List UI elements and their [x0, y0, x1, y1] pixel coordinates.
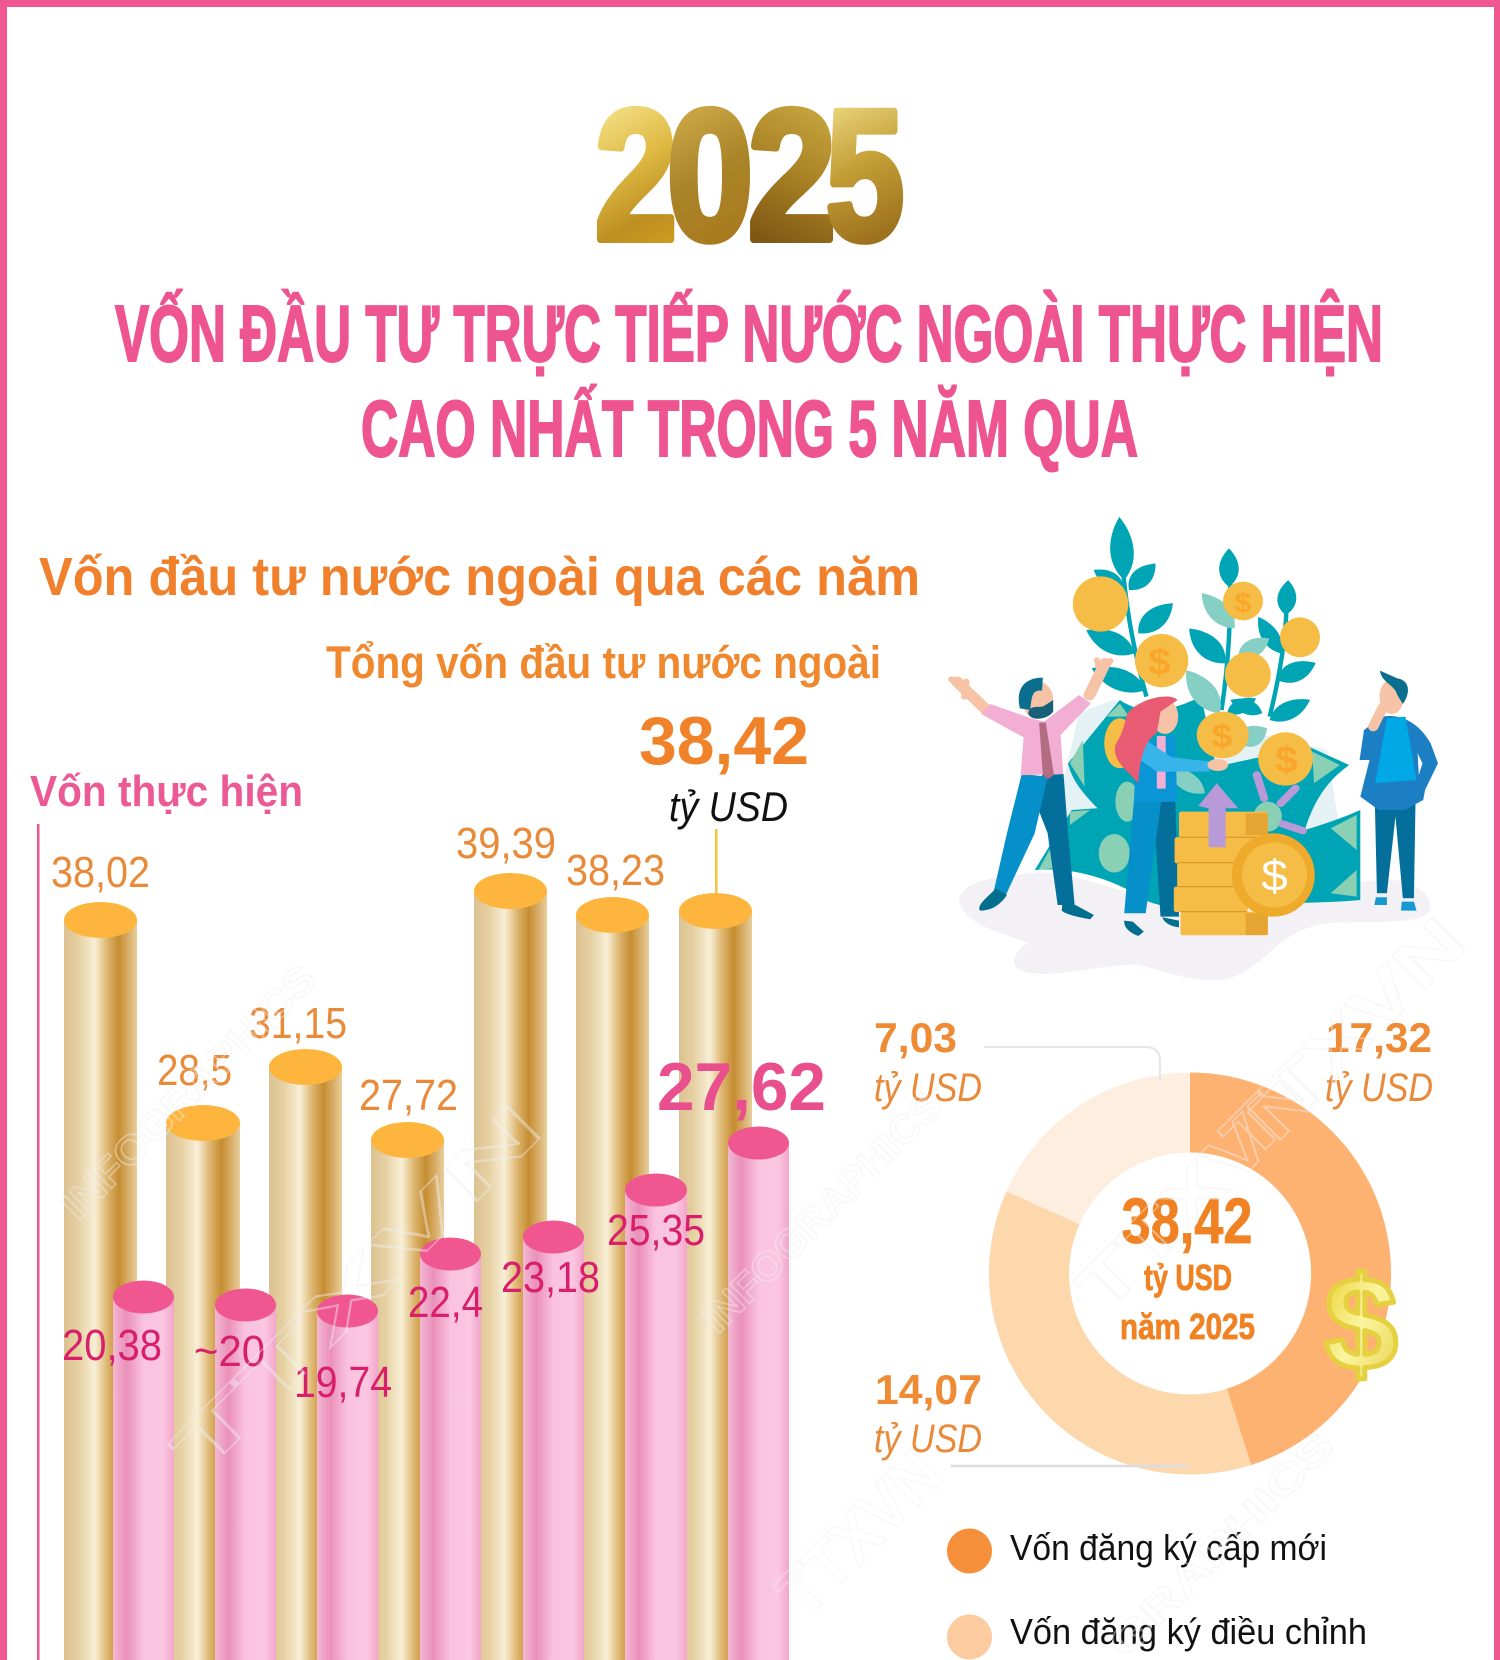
label: 14,07 billion USD: 14,07 — [875, 1366, 982, 1413]
implemented capital value labels: 25,35 — [607, 1206, 705, 1255]
legend item: new registered capital — [947, 1527, 1327, 1574]
watermarks: INFOGRAPHICS — [53, 957, 325, 1228]
dollar marks on coins — [1148, 588, 1298, 780]
legend item: adjusted registered capital: Vốn đăng ký điều chỉnh — [1010, 1611, 1367, 1652]
man with raised arms — [951, 660, 1111, 919]
plants — [1081, 516, 1320, 800]
watermarks: INFOGRAPHICS — [693, 1084, 951, 1341]
donut chart: 2025 registered capital — [989, 1072, 1398, 1475]
section heading: Vốn đầu tư nước ngoài qua các năm — [39, 547, 920, 607]
dollar marks on coins: $ — [1148, 642, 1171, 683]
legend item: adjusted registered capital — [947, 1611, 1367, 1660]
total value callout: tỷ USD — [669, 783, 788, 830]
thinking man — [1360, 671, 1438, 911]
gold coins on plants — [1073, 576, 1320, 786]
watermarks: TTXVN — [1207, 903, 1480, 1176]
donut centre total: tỷ USD — [1144, 1257, 1232, 1298]
money bills — [1035, 697, 1360, 909]
donut centre total: 38,42 — [1122, 1185, 1252, 1257]
total capital value labels: 27,72 — [359, 1071, 458, 1120]
total capital value labels: 31,15 — [249, 999, 347, 1048]
chart axis — [37, 824, 40, 1660]
heading: year 2025 in gold: 2 — [748, 73, 836, 279]
label: 14,07 billion USD — [874, 1366, 982, 1461]
subheading: total investment: Tổng vốn đầu tư nước ngoài — [326, 637, 881, 688]
segment: capital contribution — [1006, 1072, 1190, 1224]
coin stack with arrow: $ — [1261, 852, 1288, 900]
total capital value labels: 28,5 — [157, 1046, 232, 1095]
label: 7,03 billion USD: tỷ USD — [874, 1066, 982, 1110]
total value callout — [639, 703, 809, 895]
total capital value labels — [51, 819, 665, 1120]
dollar marks on coins: $ — [1275, 740, 1298, 780]
segment: adjusted registered capital — [989, 1191, 1251, 1475]
heading: year 2025 in gold: 2 — [595, 73, 677, 279]
total capital value labels: 39,39 — [456, 819, 556, 868]
dollar marks on coins: $ — [1234, 588, 1252, 619]
donut centre total: năm 2025 — [1120, 1306, 1255, 1347]
dollar marks on coins: $ — [1212, 718, 1233, 755]
heading: year 2025 in gold: 0 — [667, 73, 753, 279]
watermarks: TTXVN — [157, 1088, 557, 1489]
implemented capital value labels: 22,4 — [408, 1278, 483, 1327]
implemented capital value labels: 20,38 — [62, 1321, 162, 1370]
label: 17,32 billion USD: 17,32 — [1326, 1014, 1432, 1061]
subheading: implemented capital: Vốn thực hiện — [30, 767, 303, 816]
legend item: new registered capital: Vốn đăng ký cấp mới — [1010, 1527, 1327, 1568]
watermarks: TTXVN — [1062, 1053, 1335, 1326]
label: 7,03 billion USD: 7,03 — [874, 1014, 957, 1061]
coin stack with arrow — [1174, 775, 1315, 935]
implemented capital value labels: 23,18 — [501, 1253, 600, 1302]
main title — [115, 289, 1383, 473]
total capital value labels: 38,02 — [51, 848, 150, 897]
pink cylinders: implemented capital — [113, 1126, 789, 1660]
label: 17,32 billion USD: tỷ USD — [1325, 1066, 1433, 1110]
watermarks: TTXVN — [762, 1435, 957, 1631]
total value callout: 38,42 — [639, 703, 809, 779]
heading: year 2025 in gold — [595, 73, 904, 279]
gold cylinders: total capital — [64, 873, 752, 1660]
ground shadow — [959, 872, 1430, 980]
implemented capital value labels: ~20 — [194, 1327, 265, 1376]
label: 7,03 billion USD — [874, 1014, 982, 1110]
segment: new registered capital — [1190, 1072, 1391, 1465]
bar chart: total foreign investment and implemented capital — [51, 819, 826, 1660]
implemented capital value labels: 19,74 — [294, 1358, 392, 1407]
total capital value labels: 38,23 — [566, 846, 665, 895]
woman reaching for coin — [1115, 696, 1228, 936]
legend — [947, 1527, 1367, 1660]
highlighted 2025 implemented value: 27,62 — [657, 1049, 826, 1125]
implemented capital value labels — [62, 1206, 705, 1407]
heading: year 2025 in gold: 5 — [826, 73, 904, 279]
label: 17,32 billion USD — [1325, 1014, 1433, 1110]
leader lines — [951, 1047, 1188, 1466]
watermarks — [53, 903, 1480, 1660]
donut centre total — [1120, 1185, 1255, 1347]
illustration: people growing money — [951, 516, 1438, 980]
icon: gold dollar sign: $ — [1324, 1250, 1398, 1397]
label: 14,07 billion USD: tỷ USD — [874, 1417, 982, 1461]
